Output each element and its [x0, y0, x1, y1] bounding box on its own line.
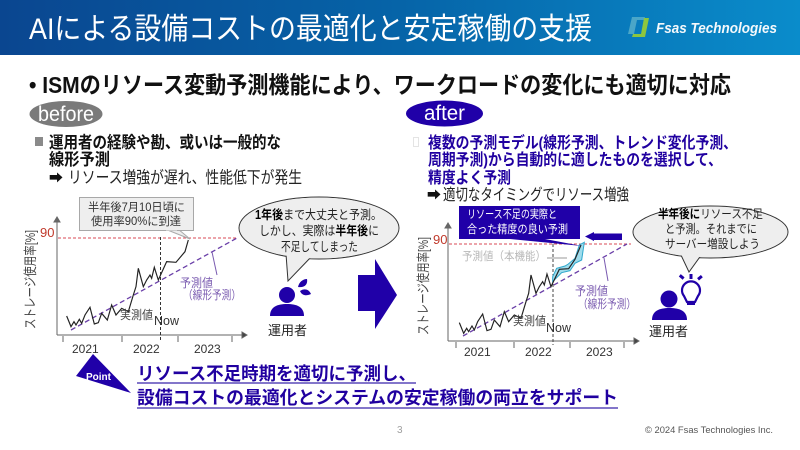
axes: [445, 223, 639, 348]
90 label: 90: [40, 225, 54, 240]
after badge: after: [424, 102, 465, 125]
conclusion text: 設備コストの最適化とシステムの安定稼働の両立をサポート: [137, 387, 618, 408]
y axis label: ストレージ使用率[%]: [415, 237, 431, 335]
measured label: 実測値: [513, 313, 546, 328]
operator label: 運用者: [268, 323, 307, 338]
speech bubble: before: [239, 197, 399, 281]
forecast label: [180, 252, 241, 302]
big arrow: [358, 259, 397, 329]
measured label: 実測値: [120, 307, 153, 322]
year labels: [72, 342, 221, 356]
measured series: [459, 245, 581, 333]
logo: Fsas Technologies: [656, 20, 777, 37]
linear forecast line: [71, 238, 237, 330]
callout: accurate forecast: [459, 206, 582, 246]
before badge: before: [38, 103, 94, 126]
forecast label: 予測値: [180, 275, 213, 290]
after chart: [415, 206, 639, 359]
logo: [628, 17, 777, 37]
header band: [0, 0, 800, 55]
after description: 周期予測)から自動的に適したものを選択して、: [428, 150, 722, 169]
main heading: • ISMのリソース変動予測機能により、ワークロードの変化にも適切に対応: [29, 72, 731, 98]
conclusion text: リソース不足時期を適切に予測し、: [137, 364, 416, 384]
axes: [54, 217, 247, 342]
speech bubble: after: [633, 206, 788, 272]
forecast label: （線形予測）: [183, 287, 241, 302]
year labels: 2021: [464, 345, 491, 359]
before description: 運用者の経験や勘、或いは一般的な: [49, 132, 281, 152]
pointer arrow: [585, 232, 622, 241]
callout: 90% date: 使用率90%に到達: [91, 214, 181, 228]
threshold line: [449, 243, 631, 245]
speech bubble: after: 半年後にリソース不足: [658, 206, 763, 221]
linear forecast label: 予測値: [575, 283, 608, 298]
year labels: 2023: [586, 345, 613, 359]
year labels: 2023: [194, 342, 221, 356]
now line: [552, 244, 554, 345]
point badge: Point: [86, 372, 112, 383]
AI forecast label: 予測値（本機能）: [462, 249, 546, 263]
callout: accurate forecast: 合った精度の良い予測: [467, 222, 568, 236]
speech bubble: after: と予測。それまでに: [665, 222, 757, 236]
callout: 90% date: [80, 198, 194, 239]
now label: Now: [154, 314, 180, 328]
speech bubble: after: サーバー増設しよう: [665, 237, 760, 251]
before description: ➡: [49, 170, 63, 186]
after description: [414, 133, 737, 204]
linear forecast label: （線形予測）: [578, 296, 636, 311]
copyright: © 2024 Fsas Technologies Inc.: [645, 425, 773, 436]
point badge: [76, 354, 131, 393]
linear forecast line: [463, 244, 627, 336]
after description: 精度よく予測: [428, 168, 511, 187]
year labels: 2021: [72, 342, 99, 356]
threshold line: [58, 237, 237, 239]
after description: 複数の予測モデル(線形予測、トレンド変化予測、: [428, 133, 737, 152]
title: AIによる設備コストの最適化と安定稼働の支援: [29, 13, 592, 46]
year labels: 2022: [133, 342, 160, 356]
icon: worried operator: [270, 279, 311, 316]
before description: 線形予測: [49, 150, 110, 169]
90 label: 90: [433, 232, 447, 247]
speech bubble: before: 不足してしまった: [281, 240, 358, 254]
speech bubble: before: しかし、実際は半年後に: [259, 223, 379, 238]
linear forecast label: [575, 258, 636, 311]
before description: [35, 132, 302, 187]
year labels: [464, 345, 613, 359]
now line: [160, 237, 162, 340]
now label: Now: [546, 321, 572, 335]
year labels: 2022: [525, 345, 552, 359]
after badge: [406, 100, 483, 126]
conclusion text: [137, 364, 618, 408]
before chart: [22, 198, 247, 356]
operator label: 運用者: [649, 324, 688, 339]
y axis label: ストレージ使用率[%]: [22, 230, 38, 329]
AI forecast band: [553, 242, 584, 282]
after description: 適切なタイミングでリソース増強: [443, 186, 629, 204]
speech bubble: before: 1年後まで大丈夫と予測。: [255, 207, 382, 222]
icon: operator with lightbulb: [652, 274, 703, 320]
page number: 3: [397, 425, 403, 436]
callout: accurate forecast: リソース不足の実際と: [467, 208, 557, 221]
callout: 90% date: 半年後7月10日頃に: [88, 200, 185, 214]
measured series: [67, 240, 188, 327]
before description: リソース増強が遅れ、性能低下が発生: [68, 168, 302, 187]
after description: ➡: [427, 187, 441, 203]
